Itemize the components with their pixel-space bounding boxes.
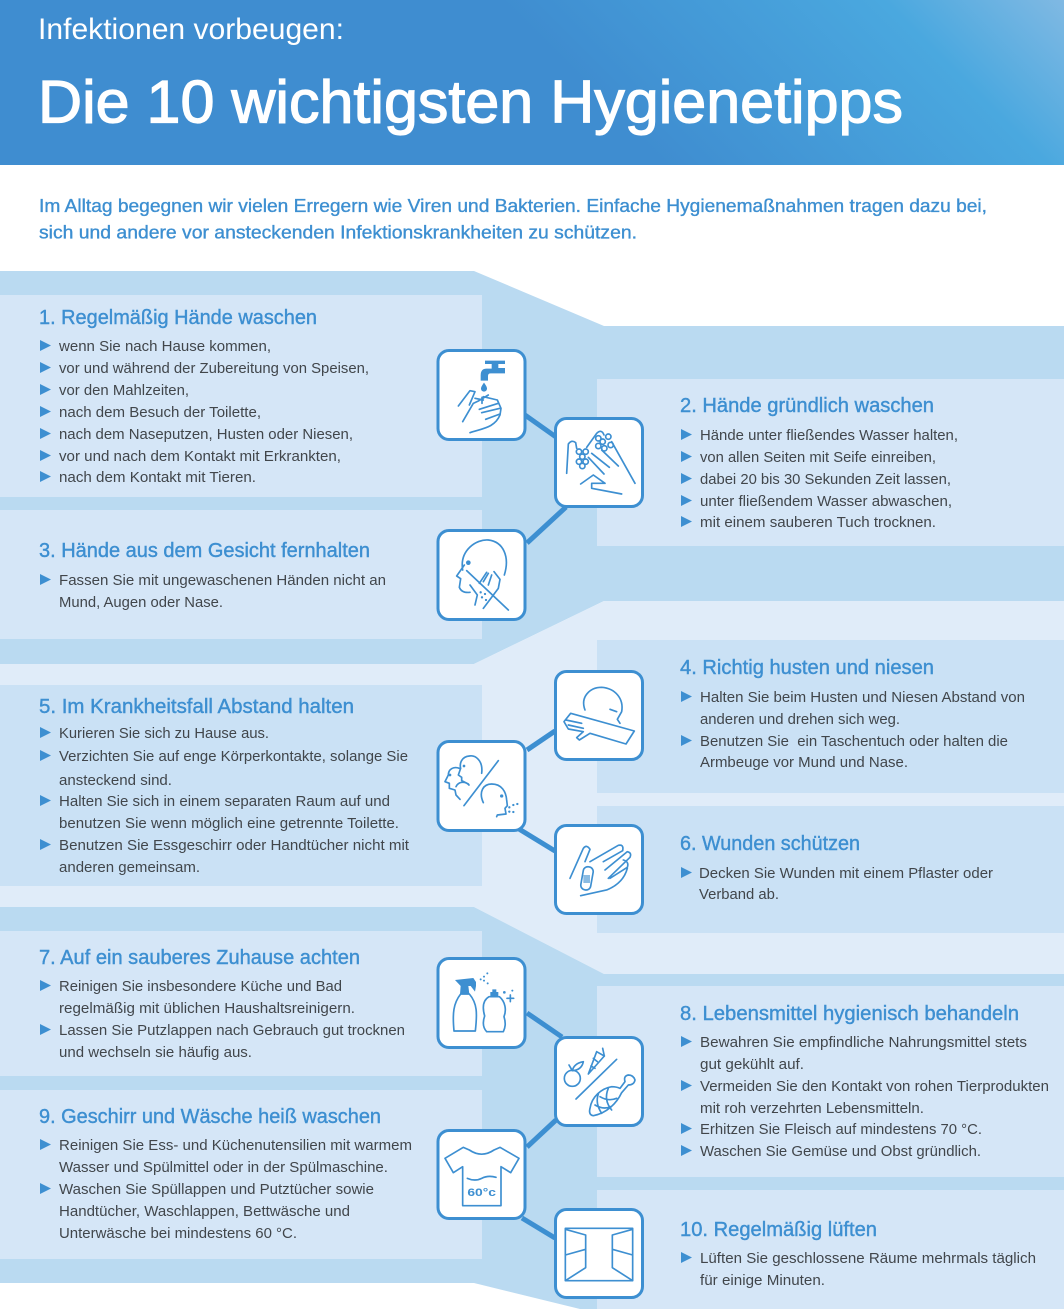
list 5: Benutzen Sie Essgeschirr oder Handtücher nicht mit	[59, 838, 409, 854]
list 4	[681, 690, 1025, 771]
list 1: nach dem Kontakt mit Tieren.	[59, 470, 256, 486]
icon 9: t-shirt at 60 degrees	[438, 1130, 525, 1218]
panel 5	[0, 685, 482, 886]
list 8: Bewahren Sie empfindliche Nahrungsmittel stets	[700, 1035, 1027, 1051]
panel 3	[0, 510, 482, 639]
list 10: für einige Minuten.	[700, 1273, 825, 1289]
list 8: mit roh verzehrten Lebensmitteln.	[700, 1101, 924, 1117]
list 5: anderen gemeinsam.	[59, 860, 200, 876]
list 7	[40, 979, 405, 1061]
heading 7: 7. Auf ein sauberes Zuhause achten	[39, 947, 360, 969]
list 8: gut gekühlt auf.	[700, 1057, 804, 1073]
list 8: Waschen Sie Gemüse und Obst gründlich.	[700, 1144, 981, 1160]
list 5: ansteckend sind.	[59, 773, 172, 789]
list 10	[681, 1251, 1036, 1289]
icon 7: cleaning products	[438, 958, 525, 1048]
heading 8: 8. Lebensmittel hygienisch behandeln	[680, 1003, 1019, 1025]
list 4: Benutzen Sie ein Taschentuch oder halten die	[700, 734, 1008, 750]
list 9: Handtücher, Waschlappen, Bettwäsche und	[59, 1204, 350, 1220]
list 5: Verzichten Sie auf enge Körperkontakte, solange Sie	[59, 749, 408, 765]
heading 4: 4. Richtig husten und niesen	[680, 657, 934, 679]
list 1: nach dem Naseputzen, Husten oder Niesen,	[59, 427, 353, 443]
list 2: dabei 20 bis 30 Sekunden Zeit lassen,	[700, 472, 951, 488]
list 9: Waschen Sie Spüllappen und Putztücher sowie	[59, 1182, 374, 1198]
list 1: vor den Mahlzeiten,	[59, 383, 189, 399]
list 1: nach dem Besuch der Toilette,	[59, 405, 261, 421]
intro text: sich und andere vor ansteckenden Infektionskrankheiten zu schützen.	[39, 222, 637, 242]
subtitle: Infektionen vorbeugen:	[38, 13, 344, 46]
list 9	[40, 1138, 412, 1242]
icon 9: t-shirt at 60 degrees: 60°c	[467, 1187, 496, 1199]
icon 6: hand with plaster	[556, 826, 642, 914]
panel 8	[597, 986, 1064, 1177]
list 7: Lassen Sie Putzlappen nach Gebrauch gut trocknen	[59, 1023, 405, 1039]
list 7: Reinigen Sie insbesondere Küche und Bad	[59, 979, 342, 995]
background band: household	[0, 907, 1064, 1309]
icon 5: keep distance when ill	[438, 742, 525, 830]
intro text	[39, 196, 987, 242]
list 6	[681, 866, 993, 903]
list 1: wenn Sie nach Hause kommen,	[58, 339, 271, 355]
list 3: Fassen Sie mit ungewaschenen Händen nicht an	[59, 573, 386, 589]
list 8: Erhitzen Sie Fleisch auf mindestens 70 °C.	[700, 1122, 982, 1138]
title: Die 10 wichtigsten Hygienetipps	[38, 68, 903, 136]
list 2: von allen Seiten mit Seife einreiben,	[700, 450, 936, 466]
heading 5: 5. Im Krankheitsfall Abstand halten	[39, 696, 354, 718]
icon 2: soaping hands	[556, 418, 642, 506]
icon 10: open window	[556, 1210, 642, 1298]
panel 2	[597, 379, 1064, 546]
list 3	[40, 573, 386, 611]
list 2: unter fließendem Wasser abwaschen,	[700, 494, 952, 510]
icon 3: do not touch face	[438, 530, 525, 620]
list 5	[40, 726, 409, 876]
list 4: Halten Sie beim Husten und Niesen Abstand von	[700, 690, 1025, 706]
icon 4: coughing into elbow	[556, 672, 642, 760]
list 1: vor und nach dem Kontakt mit Erkrankten,	[59, 449, 341, 465]
list 4: anderen und drehen sich weg.	[700, 712, 900, 728]
panel 1	[0, 295, 482, 497]
panel 7	[0, 931, 482, 1076]
list 2: mit einem sauberen Tuch trocknen.	[700, 515, 936, 531]
icon 8: separate food	[556, 1038, 642, 1126]
intro text: Im Alltag begegnen wir vielen Erregern wie Viren und Bakterien. Einfache Hygienemaßnahmen tragen dazu bei,	[39, 196, 987, 216]
heading 2: 2. Hände gründlich waschen	[680, 395, 934, 417]
list 6: Verband ab.	[699, 887, 779, 903]
list 5: Kurieren Sie sich zu Hause aus.	[59, 726, 269, 742]
panel 10	[597, 1190, 1064, 1309]
list 2	[681, 428, 958, 531]
heading 1: 1. Regelmäßig Hände waschen	[39, 307, 317, 329]
background band: illness	[0, 601, 1064, 974]
list 9: Wasser und Spülmittel oder in der Spülmaschine.	[59, 1160, 388, 1176]
panel 6	[597, 806, 1064, 933]
panel 9	[0, 1090, 482, 1259]
list 9: Unterwäsche bei mindestens 60 °C.	[59, 1226, 297, 1242]
list 7: und wechseln sie häufig aus.	[59, 1045, 252, 1061]
heading 9: 9. Geschirr und Wäsche heiß waschen	[39, 1106, 381, 1128]
list 3: Mund, Augen oder Nase.	[59, 595, 223, 611]
list 5: benutzen Sie wenn möglich eine getrennte Toilette.	[59, 816, 399, 832]
heading 10: 10. Regelmäßig lüften	[680, 1219, 877, 1241]
list 8	[681, 1035, 1049, 1160]
connectors between icons	[519, 415, 566, 1238]
icon 1: faucet and washing hands	[438, 350, 525, 440]
heading 6: 6. Wunden schützen	[680, 833, 860, 855]
list 2: Hände unter fließendes Wasser halten,	[700, 428, 958, 444]
panel 4	[597, 640, 1064, 793]
background band: hand hygiene	[0, 271, 1064, 664]
list 4: Armbeuge vor Mund und Nase.	[700, 755, 908, 771]
list 8: Vermeiden Sie den Kontakt von rohen Tierprodukten	[700, 1079, 1049, 1095]
list 6: Decken Sie Wunden mit einem Pflaster oder	[699, 866, 993, 882]
list 1: vor und während der Zubereitung von Speisen,	[59, 361, 369, 377]
list 10: Lüften Sie geschlossene Räume mehrmals täglich	[700, 1251, 1036, 1267]
list 5: Halten Sie sich in einem separaten Raum auf und	[59, 794, 390, 810]
heading 3: 3. Hände aus dem Gesicht fernhalten	[39, 540, 370, 562]
list 7: regelmäßig mit üblichen Haushaltsreinigern.	[59, 1001, 355, 1017]
list 9: Reinigen Sie Ess- und Küchenutensilien mit warmem	[59, 1138, 412, 1154]
header banner	[0, 0, 1064, 165]
list 1	[40, 339, 369, 486]
